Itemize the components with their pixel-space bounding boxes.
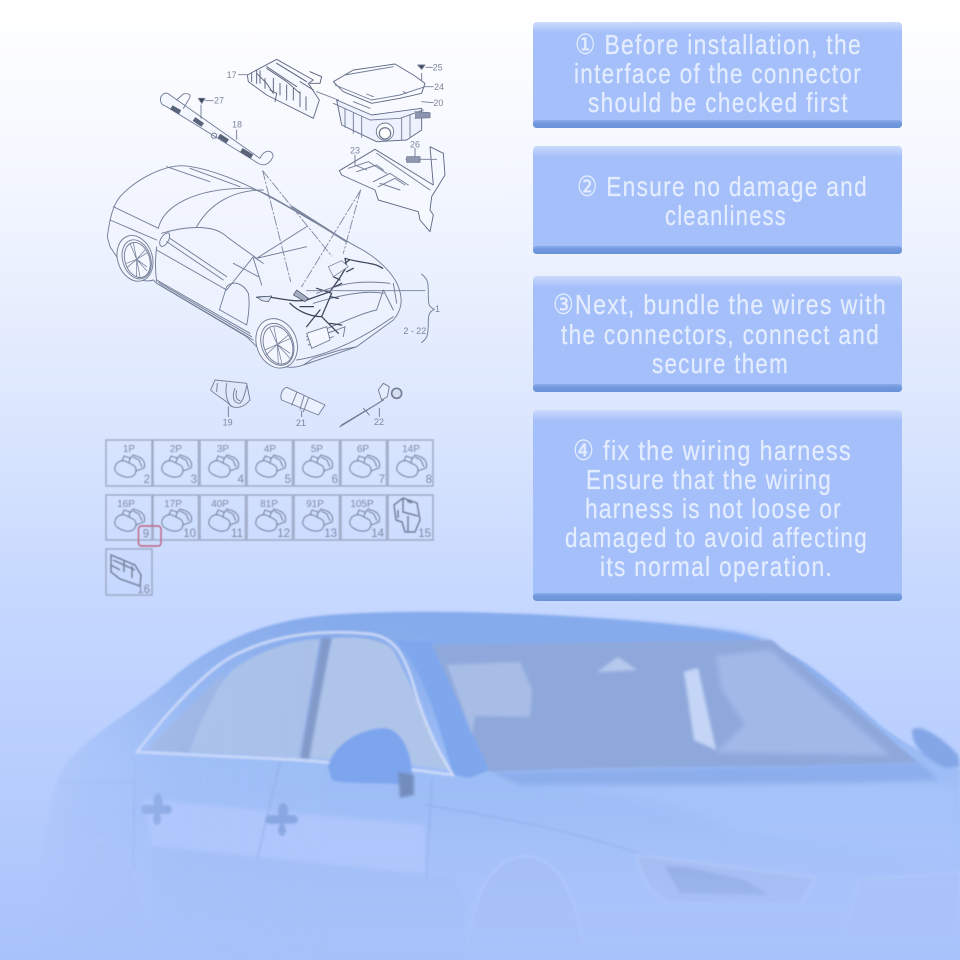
windshield right reflection [716, 650, 890, 755]
A pillar [395, 640, 490, 778]
headlight [638, 855, 660, 860]
mirror base [398, 772, 414, 798]
side window front door [307, 638, 450, 770]
row 2 connectors: 40P [211, 499, 229, 510]
highlight box on item 9 [138, 526, 161, 546]
panel: step 4: damaged to avoid affecting [565, 522, 868, 553]
row 1 connectors: 2P [170, 444, 182, 455]
part 21 [281, 387, 325, 428]
part 18 harness [160, 93, 273, 165]
part 1 bracket and labels: 1 [435, 304, 440, 314]
windshield seat highlight [684, 668, 716, 750]
panel: step 4: harness is not loose or [585, 493, 842, 524]
headrest highlight [597, 657, 637, 672]
row 2 connectors: 15 [418, 528, 431, 540]
row 2 connectors: 14 [371, 528, 385, 540]
grille [845, 872, 960, 935]
exploded wiring diagram [107, 59, 445, 374]
car line drawing [107, 166, 401, 374]
part 23 and 26 bracket: 26 [410, 139, 420, 149]
row 1 connectors: 14P [402, 444, 420, 455]
row 3 connector 16: 16 [137, 584, 150, 596]
panel: step 2 [533, 146, 902, 254]
panel: step 1 [533, 22, 902, 128]
part 19 [211, 380, 250, 427]
part 22: 22 [374, 417, 384, 427]
part 1 bracket and labels [307, 274, 440, 343]
panel: step 2: cleanliness [665, 200, 787, 231]
row 1 connectors: 8 [426, 474, 432, 486]
far mirror [912, 728, 960, 768]
panel: step 1: ① Before installation, the [575, 29, 862, 60]
door lower panel [150, 847, 465, 960]
rear wheel arch [62, 840, 150, 960]
side mirror [328, 728, 412, 785]
row 1 connectors: 6 [332, 474, 338, 486]
row 2 connectors: 10 [183, 528, 196, 540]
row 2 connectors: 11 [231, 528, 243, 540]
panel: step 1: interface of the connector [574, 58, 862, 89]
car body [60, 610, 960, 874]
row 1 connectors: 4 [238, 474, 245, 486]
door upper highlight [150, 802, 424, 868]
wiring harness on car [257, 258, 383, 333]
part 18 harness: 27 [214, 96, 224, 106]
panel: step 3: secure them [652, 348, 789, 379]
row 1 connectors: 2 [144, 474, 150, 486]
row 1 connectors: 5 [285, 474, 291, 486]
dash-dot leader lines [263, 171, 361, 287]
row 3 connector 16 [106, 549, 152, 596]
row 2 connectors: 17P [164, 499, 182, 510]
panel: step 4: Ensure that the wiring [586, 464, 832, 495]
chrome window frame [137, 632, 453, 775]
row 1 connectors: 3 [191, 474, 197, 486]
row 2 connectors: 12 [277, 528, 290, 540]
headlight inner [666, 866, 764, 894]
parts 20 and 24 control unit: 25 [433, 62, 443, 72]
panel: step 3: ③Next, bundle the wires with [553, 289, 887, 320]
part 1 bracket and labels: 2 - 22 [403, 326, 426, 336]
hood highlight [540, 779, 960, 860]
row 1 connectors: 4P [264, 444, 276, 455]
windshield [432, 640, 918, 772]
panel: step 1: should be checked first [588, 87, 849, 118]
part 19: 19 [223, 417, 233, 427]
panel: step 2: ② Ensure no damage and [577, 171, 868, 202]
row 1 connectors: 5P [311, 444, 323, 455]
part 18 harness: 18 [232, 120, 242, 130]
roof panel [608, 618, 769, 641]
panel: step 3: the connectors, connect and [561, 319, 880, 350]
row 2 connectors: 13 [324, 528, 337, 540]
door handle rear [141, 793, 172, 825]
door seam and beltline [258, 804, 432, 856]
panel: step 4 [533, 410, 902, 601]
part 23 and 26 bracket [339, 139, 445, 232]
row 2 connectors: 16P [117, 499, 135, 510]
parts 20 and 24 control unit: 20 [433, 98, 443, 108]
side window rear quarter [149, 676, 222, 752]
part 17 relay carrier [227, 59, 338, 118]
window pillar [300, 638, 331, 760]
windshield left reflection [447, 662, 532, 735]
faded car photograph [57, 610, 960, 896]
panel: step 4: its normal operation. [600, 551, 833, 582]
front wheel arch [505, 856, 544, 862]
parts 20 and 24 control unit: 24 [434, 82, 444, 92]
door handle front [265, 803, 298, 836]
row 2 connectors [106, 495, 433, 540]
row 1 connectors: 1P [123, 444, 135, 455]
panel: step 4: ④ fix the wiring harness [573, 435, 852, 466]
part 23 and 26 bracket: 23 [350, 145, 360, 155]
connector grid [106, 440, 433, 596]
highlight box on item 9: 9 [143, 528, 149, 540]
part 22 [340, 383, 402, 427]
small parts 19 21 22 [211, 380, 402, 428]
row 2 connectors: 81P [260, 499, 278, 510]
label 17: 17 [227, 70, 237, 80]
row 1 connectors: 6P [357, 444, 369, 455]
windshield base strip [490, 762, 940, 785]
part 21: 21 [296, 418, 306, 428]
row 1 connectors: 3P [217, 444, 229, 455]
row 1 connectors: 7 [379, 474, 385, 486]
row 1 connectors [106, 440, 433, 486]
side window rear door [189, 639, 320, 758]
row 2 connectors: 105P [350, 499, 374, 510]
panel: step 3 [533, 276, 902, 392]
row 2 connectors: 91P [306, 499, 324, 510]
parts 20 and 24 control unit [333, 62, 444, 142]
